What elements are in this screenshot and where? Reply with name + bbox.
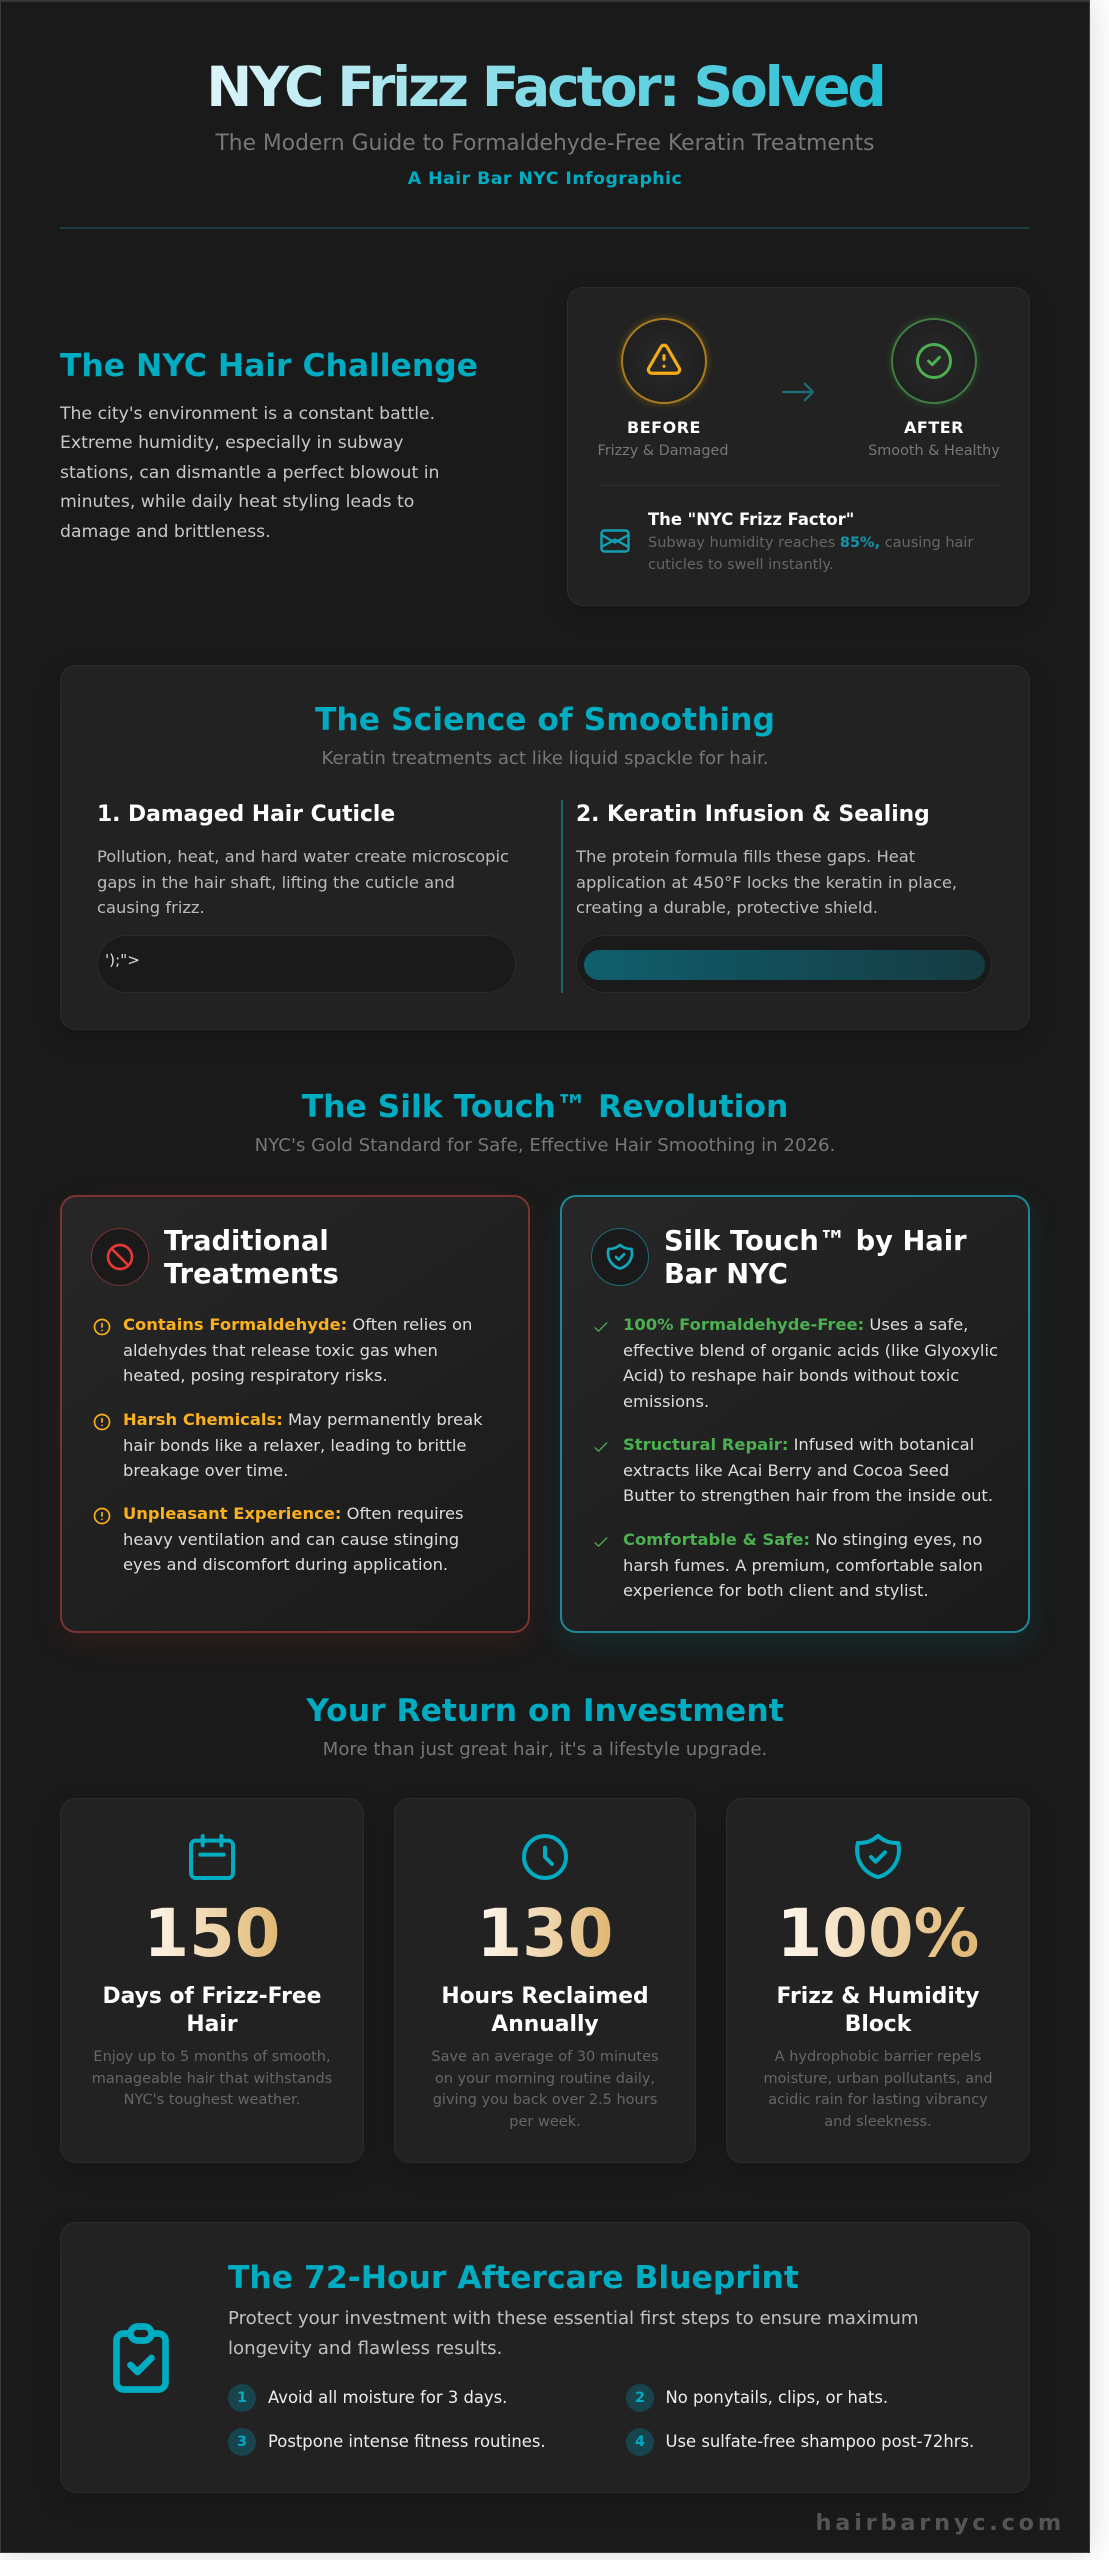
step 3: Postpone intense fitness routines. [268,2432,546,2451]
item: experience: eyes and discomfort during application. [123,1555,448,1574]
body text: The city's environment is a constant battle. [60,404,435,424]
divider [598,485,1000,486]
frizz factor text: Subway humidity reaches 85%, causing hair [648,535,973,551]
label [777,1984,979,2037]
icon: subway humidity [600,529,630,553]
intro text: Protect your investment with these essential first steps to ensure maximum [228,2308,919,2329]
frizz factor text [648,535,974,573]
before caption: Frizzy & Damaged [598,443,728,459]
stat card: 150 days [60,1798,364,2163]
frizz factor title: The "NYC Frizz Factor" [648,510,854,529]
stray markup text: ');"> [105,951,140,969]
description: acidic rain for lasting vibrancy [768,2092,988,2108]
intro text: longevity and flawless results. [228,2338,502,2359]
column 1 text: causing frizz. [97,898,205,917]
card title: Treatments [164,1259,339,1290]
intro text [228,2308,919,2359]
section: the NYC hair challenge [60,348,478,542]
item: formaldehyde [94,1315,472,1385]
card title: Silk Touch™ by Hair [664,1226,967,1257]
step 2: No ponytails, clips, or hats. [666,2388,888,2407]
diagram: sealed cuticle [576,935,992,993]
number: 150 [144,1896,280,1972]
item: formaldehyde free [594,1315,998,1410]
heading: Your Return on Investment [306,1693,784,1729]
step 2: 2 [635,2390,645,2406]
number: 100% [777,1896,979,1972]
label: Block [845,2012,911,2037]
description [431,2049,659,2130]
description: moisture, urban pollutants, and [763,2071,993,2087]
header divider [60,227,1030,229]
column 2 text [576,847,957,917]
label: Hair [186,2012,238,2037]
column 2 heading: 2. Keratin Infusion & Sealing [576,802,930,827]
label: Days of Frizz-Free [103,1984,321,2008]
heading: The Silk Touch™ Revolution [302,1089,788,1125]
item: structural repair [594,1435,993,1505]
item: comfortable: harsh fumes. A premium, comfortable salon [623,1556,983,1574]
description: giving you back over 2.5 hours [433,2092,657,2108]
arrow [782,382,814,402]
item: comfortable: Comfortable & Safe: No stinging eyes, no [623,1530,982,1549]
item: formaldehyde: heated, posing respiratory risks. [123,1366,388,1385]
item: chemicals: breakage over time. [123,1461,288,1480]
header [206,55,884,189]
body text: minutes, while daily heat styling leads to [60,492,414,512]
panel: traditional treatments [60,1195,530,1633]
section heading: silk touch [255,1089,835,1156]
description: and sleekness. [824,2114,932,2130]
item: chemicals: hair bonds like a relaxer, leading to brittle [123,1436,466,1454]
panel: aftercare blueprint [60,2222,1030,2493]
column 2 text: creating a durable, protective shield. [576,898,878,917]
item: comfortable [594,1530,983,1600]
heading: The 72-Hour Aftercare Blueprint [228,2260,799,2296]
item: chemicals: Harsh Chemicals: May permanently break [123,1410,483,1429]
icon: ban [91,1228,149,1286]
tagline: A Hair Bar NYC Infographic [408,169,682,189]
column 1 heading: 1. Damaged Hair Cuticle [97,802,395,827]
icon: before warning [621,318,707,404]
card title [664,1226,967,1290]
item: structural repair: Butter to strengthen hair from the inside out. [623,1486,993,1505]
column 2 text: The protein formula fills these gaps. Heat [576,847,915,866]
body text: Extreme humidity, especially in subway [60,433,404,453]
step 1: 1 [237,2390,247,2406]
item: formaldehyde: Contains Formaldehyde: Often relies on [123,1315,472,1334]
item: formaldehyde free: 100% Formaldehyde-Free: Uses a safe, [623,1315,968,1334]
after caption: Smooth & Healthy [868,443,1000,459]
column 1 text: gaps in the hair shaft, lifting the cuticle and [97,872,455,892]
icon: shield [591,1228,649,1286]
step 3 [228,2428,546,2456]
subheading: NYC's Gold Standard for Safe, Effective Hair Smoothing in 2026. [255,1135,835,1156]
description: per week. [509,2114,581,2130]
title: NYC Frizz Factor: Solved [206,55,884,119]
panel: silk touch [560,1195,1030,1633]
stat card: 130 hours [394,1798,696,2163]
card title: Bar NYC [664,1259,788,1290]
item: structural repair: Structural Repair: Infused with botanical [623,1435,974,1454]
step 2 [626,2384,888,2412]
item: experience: Unpleasant Experience: Often requires [123,1504,464,1523]
item: structural repair: extracts like Acai Berry and Cocoa Seed [623,1460,949,1480]
description: Enjoy up to 5 months of smooth, [93,2049,331,2065]
panel: before and after [567,287,1030,606]
subtitle: The Modern Guide to Formaldehyde-Free Keratin Treatments [215,131,875,156]
icon: shield check [855,1834,901,1880]
keratin bar [584,950,985,980]
icon: calendar [189,1834,235,1880]
panel: the science of smoothing [60,665,1030,1030]
description: manageable hair that withstands [92,2071,332,2087]
label: Hours Reclaimed [441,1984,649,2008]
step 4: 4 [635,2434,645,2450]
description [763,2049,993,2130]
icon: clipboard check [113,2323,169,2393]
item: experience: heavy ventilation and can cause stinging [123,1530,459,1548]
item: comfortable: experience for both client and stylist. [623,1581,929,1600]
label [441,1984,649,2037]
column 1 text: Pollution, heat, and hard water create microscopic [97,847,509,866]
item: formaldehyde: aldehydes that release toxic gas when [123,1340,438,1360]
icon: after check [891,318,977,404]
body text [60,404,439,542]
body text: damage and brittleness. [60,522,271,542]
column 2 text: application at 450°F locks the keratin in place, [576,872,957,892]
item: experience [94,1504,464,1574]
number: 130 [477,1896,613,1972]
item: formaldehyde free: Acid) to reshape hair bonds without toxic [623,1366,959,1385]
item: formaldehyde free: emissions. [623,1392,709,1410]
heading: The Science of Smoothing [315,702,775,738]
description: Save an average of 30 minutes [431,2049,659,2065]
section heading: return on investment [306,1693,784,1760]
frizz factor text: cuticles to swell instantly. [648,557,834,573]
before label: BEFORE [627,418,701,437]
step 3: 3 [237,2434,247,2450]
heading: The NYC Hair Challenge [60,348,478,384]
step 4 [626,2428,974,2456]
label: Frizz & Humidity [777,1984,979,2008]
after label: AFTER [904,418,964,437]
subheading: More than just great hair, it's a lifestyle upgrade. [323,1739,767,1760]
description: A hydrophobic barrier repels [775,2049,981,2065]
stat card: 100 percent [726,1798,1030,2163]
subheading: Keratin treatments act like liquid spackle for hair. [321,748,769,769]
description [92,2049,332,2108]
description: on your morning routine daily, [435,2071,655,2087]
step 1: Avoid all moisture for 3 days. [268,2388,507,2407]
item: chemicals [94,1410,483,1480]
item: formaldehyde free: effective blend of organic acids (like Glyoxylic [623,1340,998,1360]
body text: stations, can dismantle a perfect blowout in [60,463,439,483]
step 4: Use sulfate-free shampoo post-72hrs. [666,2432,974,2451]
column 1 text [97,847,509,917]
card title [164,1226,339,1290]
card title: Traditional [164,1226,329,1257]
diagram: damaged cuticle [97,935,516,993]
description: NYC's toughest weather. [124,2092,300,2108]
step 1 [228,2384,507,2412]
footer watermark: hairbarnyc.com [816,2510,1065,2536]
label: Annually [491,2012,599,2037]
label [103,1984,321,2037]
column divider [561,800,562,993]
icon: clock [522,1834,568,1880]
